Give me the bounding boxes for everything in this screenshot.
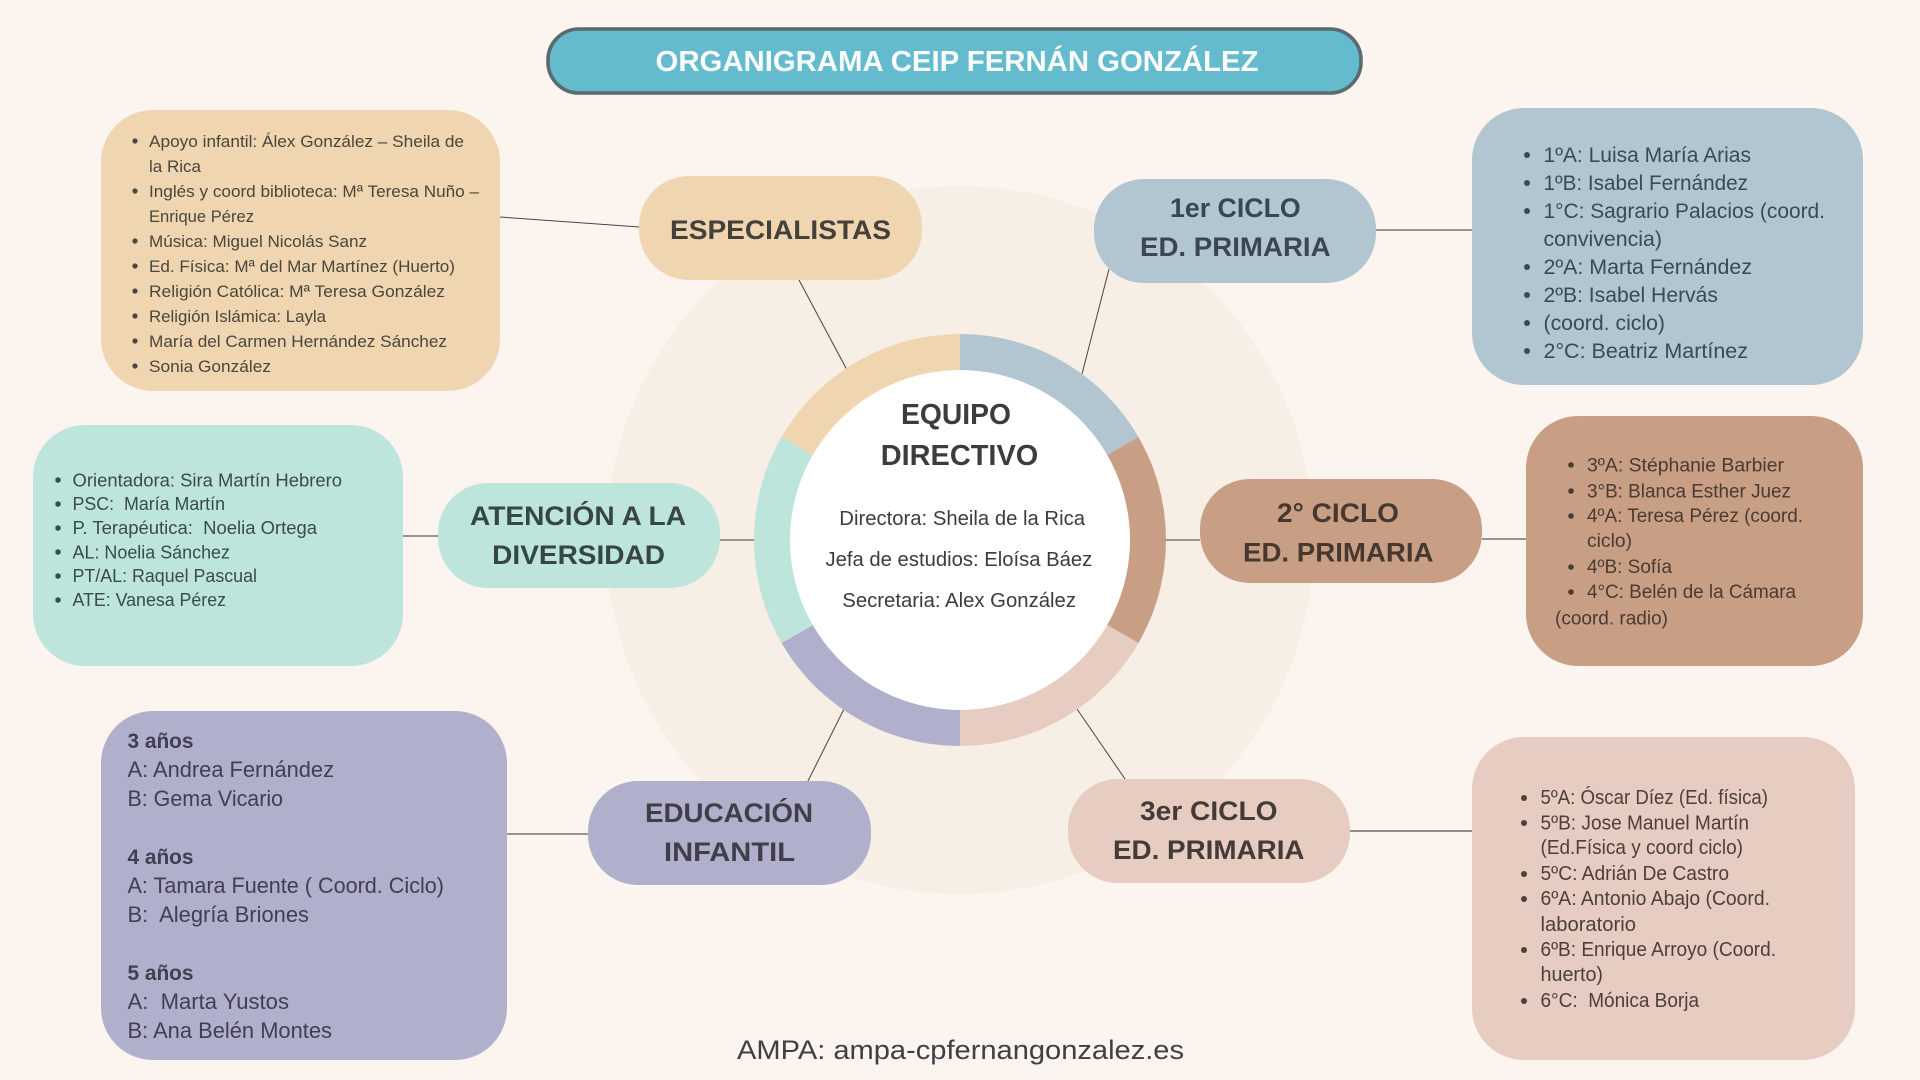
connector lines bbox=[403, 217, 1526, 834]
pill: 3er ciclo: 3er CICLO bbox=[1140, 796, 1278, 826]
panel: 1er ciclo: 1ºA: Luisa María Arias bbox=[1544, 144, 1751, 167]
panel: especialistas: Religión Islámica: Layla bbox=[149, 307, 327, 326]
centre circle: equipo directivo: Secretaria: Alex González bbox=[842, 590, 1076, 612]
panel: educación infantil bbox=[101, 711, 507, 1060]
panel: 2º ciclo: 3°B: Blanca Esther Juez bbox=[1587, 482, 1791, 503]
panel: atención a la diversidad: PT/AL: Raquel Pascual bbox=[72, 566, 257, 586]
panel: especialistas: Sonia González bbox=[149, 357, 271, 376]
panel: educación infantil: 5 años bbox=[128, 962, 194, 985]
panel: 2º ciclo: 4ºB: Sofía bbox=[1587, 557, 1672, 578]
footer: ampa website: AMPA: ampa-cpfernangonzalez.es bbox=[737, 1035, 1184, 1065]
centre circle: equipo directivo bbox=[790, 370, 1130, 710]
panel: 2º ciclo: 4ºA: Teresa Pérez (coord. bbox=[1587, 506, 1803, 527]
panel: 1er ciclo bbox=[1472, 108, 1863, 385]
panel: educación infantil: B: Ana Belén Montes bbox=[128, 1018, 332, 1043]
panel: 1er ciclo: 2ºB: Isabel Hervás bbox=[1544, 284, 1718, 307]
pill: 1er ciclo bbox=[1094, 179, 1376, 283]
pill: atención a la diversidad: ATENCIÓN A LA bbox=[470, 500, 686, 531]
pill: 3er ciclo: ED. PRIMARIA bbox=[1113, 835, 1304, 865]
pill: 1er ciclo: 1er CICLO bbox=[1170, 193, 1301, 223]
panel: especialistas: Música: Miguel Nicolás Sanz bbox=[149, 232, 367, 251]
pill: educación infantil: EDUCACIÓN bbox=[645, 797, 813, 828]
panel: especialistas: Enrique Pérez bbox=[149, 207, 254, 226]
pill: educación infantil bbox=[588, 781, 871, 885]
panel: 3er ciclo: 6ºB: Enrique Arroyo (Coord. bbox=[1540, 939, 1776, 961]
panel: educación infantil: B: Gema Vicario bbox=[128, 786, 283, 811]
panel: educación infantil: A: Tamara Fuente ( Coord. Ciclo) bbox=[128, 873, 444, 898]
panel: 3er ciclo bbox=[1472, 737, 1855, 1060]
pill: atención a la diversidad bbox=[438, 483, 720, 588]
pill: especialistas bbox=[639, 176, 922, 280]
panel: 1er ciclo: 1ºB: Isabel Fernández bbox=[1544, 172, 1748, 195]
panel: 3er ciclo: 6ºA: Antonio Abajo (Coord. bbox=[1540, 888, 1770, 910]
panel: 1er ciclo: 1°C: Sagrario Palacios (coord. bbox=[1544, 200, 1825, 223]
pill: atención a la diversidad: DIVERSIDAD bbox=[492, 540, 665, 570]
panel: 3er ciclo: laboratorio bbox=[1540, 914, 1636, 936]
panel: 3er ciclo: huerto) bbox=[1540, 964, 1603, 986]
panel: educación infantil: 4 años bbox=[128, 846, 194, 869]
panel: especialistas: Apoyo infantil: Álex González – Sheila de bbox=[149, 132, 464, 151]
panel: especialistas: María del Carmen Hernández Sánchez bbox=[149, 332, 447, 351]
panel: 3er ciclo: 6°C: Mónica Borja bbox=[1540, 990, 1700, 1012]
panel: 2º ciclo bbox=[1526, 416, 1863, 666]
title banner: ORGANIGRAMA CEIP FERNÁN GONZÁLEZ bbox=[656, 44, 1258, 78]
panel: 1er ciclo: 2ºA: Marta Fernández bbox=[1544, 256, 1752, 279]
panel: atención a la diversidad bbox=[33, 425, 403, 666]
panel: atención a la diversidad: PSC: María Martín bbox=[72, 494, 225, 514]
panel: 3er ciclo: 5ºA: Óscar Díez (Ed. física) bbox=[1540, 786, 1768, 809]
panel: 1er ciclo: (coord. ciclo) bbox=[1544, 312, 1665, 335]
centre circle: equipo directivo: Jefa de estudios: Eloísa Báez bbox=[826, 549, 1092, 571]
pill: 3er ciclo bbox=[1068, 779, 1350, 883]
panel: educación infantil: B: Alegría Briones bbox=[128, 902, 309, 927]
panel: especialistas: la Rica bbox=[149, 157, 202, 176]
panel: especialistas: Inglés y coord biblioteca: Mª Teresa Nuño – bbox=[149, 182, 480, 201]
title banner bbox=[548, 29, 1361, 93]
panel: especialistas: Ed. Física: Mª del Mar Martínez (Huerto) bbox=[149, 257, 455, 276]
panel: 2º ciclo: (coord. radio) bbox=[1555, 609, 1668, 630]
pill: 1er ciclo: ED. PRIMARIA bbox=[1140, 232, 1331, 262]
central ring: six coloured segments bbox=[754, 334, 1166, 746]
panel: educación infantil: A: Marta Yustos bbox=[128, 989, 289, 1014]
panel: 2º ciclo: ciclo) bbox=[1587, 531, 1632, 552]
panel: 2º ciclo: 4°C: Belén de la Cámara bbox=[1587, 582, 1796, 603]
pill: 2º ciclo: 2° CICLO bbox=[1277, 498, 1399, 528]
panel: educación infantil: A: Andrea Fernández bbox=[128, 757, 334, 782]
pill: especialistas: ESPECIALISTAS bbox=[670, 215, 891, 245]
panel: atención a la diversidad: ATE: Vanesa Pérez bbox=[72, 590, 226, 610]
panel: atención a la diversidad: P. Terapéutica: Noelia Ortega bbox=[72, 518, 318, 538]
panel: especialistas bbox=[101, 110, 500, 391]
panel: 2º ciclo: 3ºA: Stéphanie Barbier bbox=[1587, 456, 1785, 477]
panel: atención a la diversidad: AL: Noelia Sánchez bbox=[72, 542, 230, 562]
panel: 3er ciclo: (Ed.Física y coord ciclo) bbox=[1540, 837, 1743, 859]
panel: 3er ciclo: 5ºC: Adrián De Castro bbox=[1540, 863, 1729, 885]
pill: 2º ciclo bbox=[1200, 479, 1482, 583]
centre circle: equipo directivo: Directora: Sheila de la Rica bbox=[839, 508, 1086, 530]
panel: 1er ciclo: convivencia) bbox=[1544, 228, 1662, 251]
centre circle: equipo directivo: DIRECTIVO bbox=[881, 440, 1038, 472]
panel: especialistas: Religión Católica: Mª Teresa González bbox=[149, 282, 445, 301]
background circle bbox=[606, 186, 1314, 894]
pill: educación infantil: INFANTIL bbox=[664, 837, 795, 867]
panel: 1er ciclo: 2°C: Beatriz Martínez bbox=[1544, 340, 1748, 363]
pill: 2º ciclo: ED. PRIMARIA bbox=[1243, 538, 1434, 568]
centre circle: equipo directivo: EQUIPO bbox=[901, 399, 1011, 431]
panel: atención a la diversidad: Orientadora: Sira Martín Hebrero bbox=[72, 470, 342, 490]
panel: educación infantil: 3 años bbox=[128, 730, 194, 753]
panel: 3er ciclo: 5ºB: Jose Manuel Martín bbox=[1540, 812, 1749, 834]
